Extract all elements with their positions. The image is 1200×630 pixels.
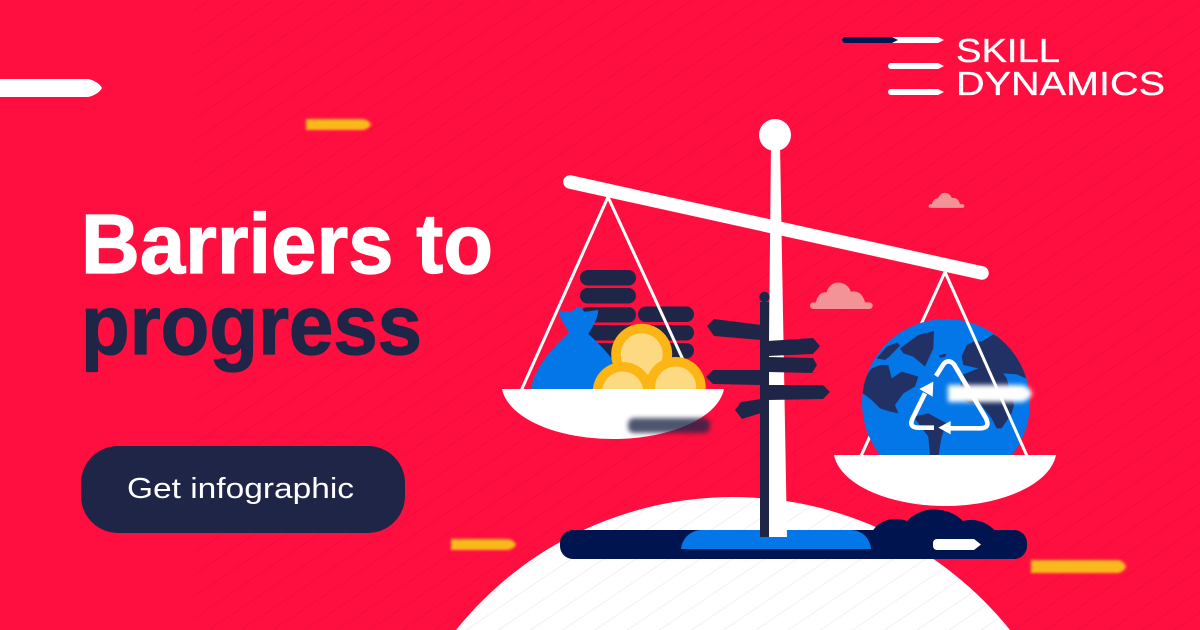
recycle symbol — [911, 361, 987, 434]
button: get infographic: Get infographic — [127, 473, 354, 505]
continents — [862, 331, 1030, 457]
left pan contents — [520, 197, 706, 389]
scale post — [767, 145, 787, 537]
logo — [842, 32, 1165, 102]
sign arm 5 — [768, 385, 830, 400]
scale beam — [570, 182, 982, 273]
gold coins — [592, 324, 706, 389]
blurred yellow dash top — [306, 119, 371, 130]
logo icon bars — [842, 37, 944, 95]
title line two: progress — [81, 278, 422, 372]
signpost — [706, 292, 830, 537]
blurred shadow on left pan — [628, 418, 710, 433]
title — [81, 197, 493, 372]
white hill — [456, 497, 1010, 630]
sign arm 2 — [768, 338, 820, 356]
sign arm 3 — [768, 357, 817, 373]
right string over globe — [945, 272, 1027, 456]
right pan bowl — [834, 455, 1056, 506]
blue mound — [681, 530, 871, 549]
left pan bowl — [502, 389, 724, 439]
sign arm 6 — [735, 399, 761, 419]
title line one: Barriers to — [81, 197, 493, 291]
earth globe — [862, 319, 1030, 455]
logo word DYNAMICS: DYNAMICS — [956, 65, 1165, 102]
left pan strings — [521, 197, 685, 391]
dark bush — [872, 509, 996, 532]
logo word SKILL: SKILL — [956, 32, 1060, 69]
blurred white dash on globe — [948, 385, 1032, 402]
signpost pole — [760, 302, 769, 537]
decorative white arrow bar left — [0, 79, 102, 97]
coin stacks — [580, 270, 694, 358]
button: get infographic — [81, 446, 405, 533]
blurred yellow dash lower left — [451, 539, 516, 550]
scale top knob — [759, 119, 791, 151]
cloud: upper pink — [929, 193, 964, 208]
sign arm 4 — [706, 370, 761, 385]
right pan strings behind globe — [861, 272, 945, 456]
sign arm 1 — [707, 319, 761, 340]
signpost ball — [759, 292, 770, 302]
blurred yellow dash lower right — [1031, 560, 1126, 573]
cloud: middle pink — [810, 282, 873, 309]
base platform — [560, 509, 1027, 559]
money bag — [531, 307, 615, 389]
white dash on base — [933, 539, 981, 550]
